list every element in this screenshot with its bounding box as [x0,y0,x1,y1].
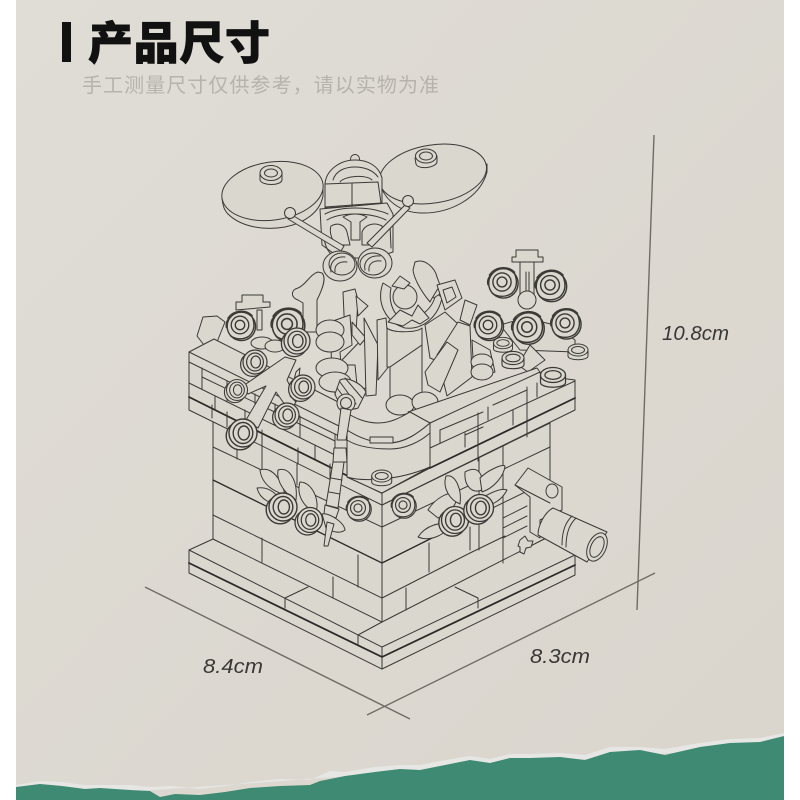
hanging chain [322,378,366,546]
wall vertical corner [381,493,383,622]
green band with torn edge [16,736,784,800]
left cymbal disc [218,155,327,228]
icon: building block model line drawing [189,137,611,669]
back rings cluster [316,320,438,415]
left antenna rod [284,208,344,251]
left wall [213,420,382,622]
cross axle hole [518,536,533,554]
right rose cluster [471,250,581,380]
corner block [347,467,430,505]
right wall flower cluster [391,466,507,539]
arrow-shaped ornament with rings [224,328,315,450]
left wall flower cluster [257,469,371,535]
depth label: 8.4cm [203,656,263,678]
left rim with bricks [189,339,382,505]
goggles [323,248,392,281]
right antenna rod [367,196,414,247]
top corner studs right [494,337,588,387]
bone horn left [292,272,324,332]
side connector with barrel [515,468,611,564]
torn paper edge [16,733,784,800]
central torso pieces [330,289,390,396]
right horn and links [413,261,477,396]
title marker bar [62,22,71,62]
crown centerpiece [381,276,442,400]
subtitle note: 手工测量尺寸仅供参考，请以实物为准 [82,74,439,97]
helmet head [320,154,393,258]
right wall [382,413,550,622]
height label: 10.8cm [662,323,729,345]
left rose cluster [197,295,305,352]
right rim with bricks [382,372,575,505]
width label: 8.3cm [530,646,590,668]
rounded corner plate [345,412,430,481]
corner stud [372,470,392,486]
right cymbal disc [375,137,491,213]
base plate [189,536,575,669]
right rim top strip [408,368,540,423]
title: 产品尺寸 [88,18,270,69]
dimension lines [145,135,655,719]
